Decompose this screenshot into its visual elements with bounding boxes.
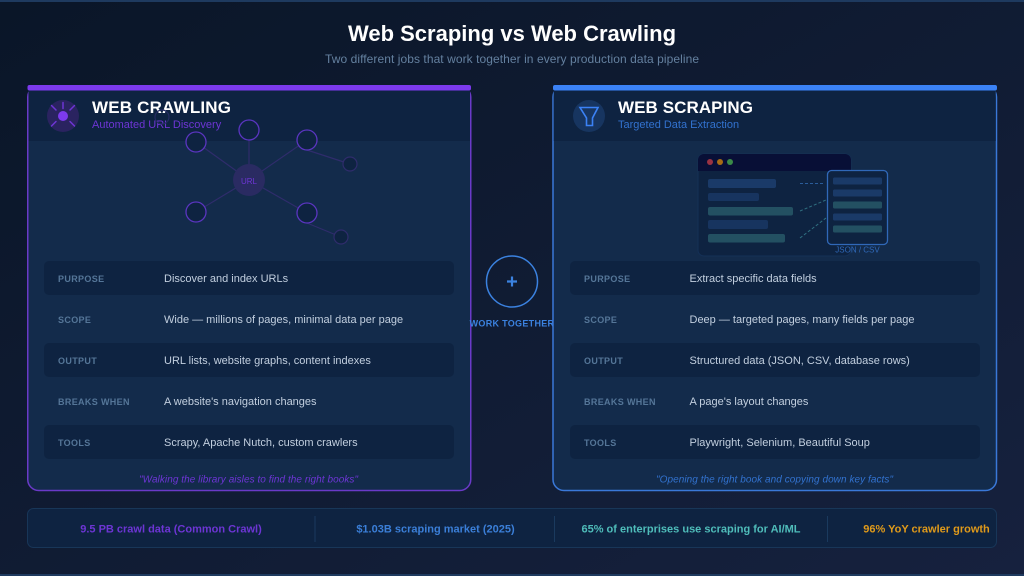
comparison table: web scraping: Extract specific data fields — [690, 273, 817, 285]
panel heading: web scraping: WEB SCRAPING — [618, 98, 753, 117]
panel: web crawling — [28, 85, 471, 490]
comparison table: web crawling: Discover and index URLs — [164, 273, 289, 285]
panel header: web scraping — [554, 90, 996, 141]
diagram: URL network — [155, 110, 357, 244]
comparison table: web scraping: Playwright, Selenium, Beautiful Soup — [690, 437, 870, 449]
panel: web scraping — [553, 85, 997, 490]
panel subheading: web crawling: Automated URL Discovery — [92, 119, 222, 131]
stat: scraping market: $1.03B scraping market (2025) — [356, 524, 515, 536]
diagram: browser to structured data — [698, 154, 888, 256]
comparison table: web crawling: SCOPE — [58, 315, 91, 325]
panel subheading: web scraping: Targeted Data Extraction — [618, 119, 739, 131]
comparison table: web scraping: TOOLS — [584, 438, 617, 448]
diagram: browser to structured data: JSON / CSV — [835, 246, 880, 254]
panel heading: web crawling: WEB CRAWLING — [92, 98, 231, 117]
quote: crawling: "Walking the library aisles to find the right books" — [139, 474, 358, 486]
comparison table: web scraping — [570, 261, 980, 459]
accent bar: web scraping — [553, 85, 997, 90]
stats strip — [28, 508, 996, 548]
stat: crawler growth: 96% YoY crawler growth — [863, 524, 990, 536]
icon: crawler sun — [47, 100, 79, 132]
comparison table: web crawling: BREAKS WHEN — [58, 397, 130, 407]
connector: work together — [470, 256, 555, 328]
comparison table: web crawling: OUTPUT — [58, 356, 97, 366]
quote: scraping: "Opening the right book and copying down key facts" — [656, 474, 893, 486]
connector: work together: WORK TOGETHER — [470, 318, 555, 328]
title: Web Scraping vs Web Crawling — [348, 21, 676, 46]
comparison table: web scraping: A page's layout changes — [690, 396, 809, 408]
subtitle: Two different jobs that work together in every production data pipeline — [325, 52, 699, 66]
stat: crawl data: 9.5 PB crawl data (Common Crawl) — [80, 524, 262, 536]
stat: enterprises: 65% of enterprises use scraping for AI/ML — [581, 524, 801, 536]
plus sign — [507, 276, 517, 286]
comparison table: web scraping: SCOPE — [584, 315, 617, 325]
panel header: web crawling — [28, 90, 470, 141]
comparison table: web scraping: Structured data (JSON, CSV, database rows) — [690, 355, 910, 367]
accent bar: web crawling — [28, 85, 471, 90]
comparison table: web scraping: BREAKS WHEN — [584, 397, 656, 407]
comparison table: web crawling: Wide — millions of pages, minimal data per page — [164, 314, 403, 326]
comparison table: web crawling: PURPOSE — [58, 274, 104, 284]
comparison table: web scraping: Deep — targeted pages, many fields per page — [690, 314, 915, 326]
comparison table: web crawling: URL lists, website graphs, content indexes — [164, 355, 371, 367]
node label: URL — [241, 177, 258, 186]
comparison table: web crawling — [44, 261, 454, 459]
comparison table: web scraping: PURPOSE — [584, 274, 630, 284]
comparison table: web crawling: TOOLS — [58, 438, 91, 448]
comparison table: web scraping: OUTPUT — [584, 356, 623, 366]
comparison table: web crawling: Scrapy, Apache Nutch, custom crawlers — [164, 437, 358, 449]
icon: funnel — [573, 100, 605, 132]
comparison table: web crawling: A website's navigation changes — [164, 396, 317, 408]
